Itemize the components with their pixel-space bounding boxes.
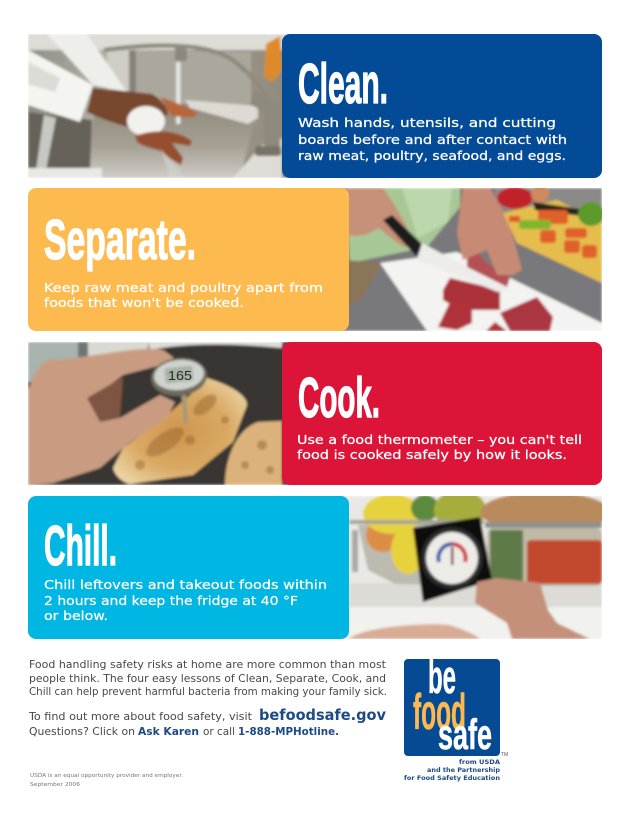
text: Cook description: food is cooked safely by how it looks. bbox=[297, 447, 567, 462]
logo: be food safe: from USDA bbox=[459, 758, 500, 766]
text: Clean description: raw meat, poultry, seafood, and eggs. bbox=[298, 148, 566, 163]
logo: be food safe: TM bbox=[501, 752, 508, 758]
heading: Cook: Cook. bbox=[298, 366, 380, 430]
text: Cook description bbox=[297, 432, 582, 462]
text: Separate description: foods that won't be cooked. bbox=[44, 295, 244, 310]
panel: Chill bbox=[28, 496, 349, 639]
logo: be food safe: be bbox=[428, 650, 456, 703]
photo: washing hands at sink bbox=[28, 34, 288, 178]
text: questions and hotline: or call bbox=[203, 725, 235, 738]
text: website link: To find out more about food safety, visit bbox=[28, 710, 253, 723]
text: Clean description: boards before and after contact with bbox=[298, 132, 567, 147]
text: Chill description bbox=[44, 577, 327, 623]
text: Clean description bbox=[298, 115, 567, 163]
text: Cook description: Use a food thermometer – you can't tell bbox=[297, 432, 582, 447]
photo: cutting raw meat bbox=[340, 185, 604, 331]
text: Chill description: Chill leftovers and takeout foods within bbox=[44, 577, 327, 592]
text: Separate description: Keep raw meat and poultry apart from bbox=[44, 280, 323, 295]
text: food safety intro: people think. The four easy lessons of Clean, Separate, Cook, and bbox=[29, 672, 386, 685]
text: website link: befoodsafe.gov bbox=[259, 706, 386, 724]
logo: be food safe: for Food Safety Education bbox=[404, 774, 500, 782]
text: thermometer reading: 165 bbox=[168, 368, 192, 383]
text: Chill description: or below. bbox=[44, 608, 108, 623]
logo: be food safe: food bbox=[413, 684, 466, 740]
text: USDA disclaimer: September 2006 bbox=[30, 782, 80, 788]
text: Clean description: Wash hands, utensils, and cutting bbox=[298, 115, 556, 130]
heading: Chill: Chill. bbox=[44, 514, 117, 578]
text: questions and hotline: Questions? Click on bbox=[29, 725, 135, 738]
panel: Cook bbox=[282, 342, 602, 485]
logo: be food safe: safe bbox=[438, 711, 492, 759]
text: Chill description: 2 hours and keep the fridge at 40 °F bbox=[44, 593, 298, 608]
text: food safety intro: Food handling safety risks at home are more common than most bbox=[29, 658, 387, 671]
text: food safety intro: Chill can help prevent harmful bacteria from making your family sick. bbox=[29, 685, 387, 698]
text: USDA disclaimer bbox=[30, 773, 183, 788]
text: food safety intro bbox=[29, 658, 387, 698]
logo: be food safe bbox=[404, 650, 508, 782]
text: questions and hotline bbox=[29, 725, 339, 738]
logo: be food safe: and the Partnership bbox=[427, 766, 500, 774]
heading: Clean: Clean. bbox=[298, 52, 388, 116]
text: questions and hotline: Ask Karen bbox=[138, 726, 199, 738]
text: Separate description bbox=[44, 280, 323, 310]
text: USDA disclaimer: USDA is an equal opportunity provider and employer. bbox=[30, 773, 183, 779]
photo: fridge thermometer bbox=[340, 490, 610, 639]
panel: Clean bbox=[282, 34, 602, 178]
text: website link bbox=[28, 706, 386, 724]
heading: Separate: Separate. bbox=[44, 208, 196, 272]
panel: Separate bbox=[28, 188, 349, 331]
photo: thermometer in chicken bbox=[28, 342, 288, 485]
text: questions and hotline: 1-888-MPHotline. bbox=[238, 726, 339, 738]
